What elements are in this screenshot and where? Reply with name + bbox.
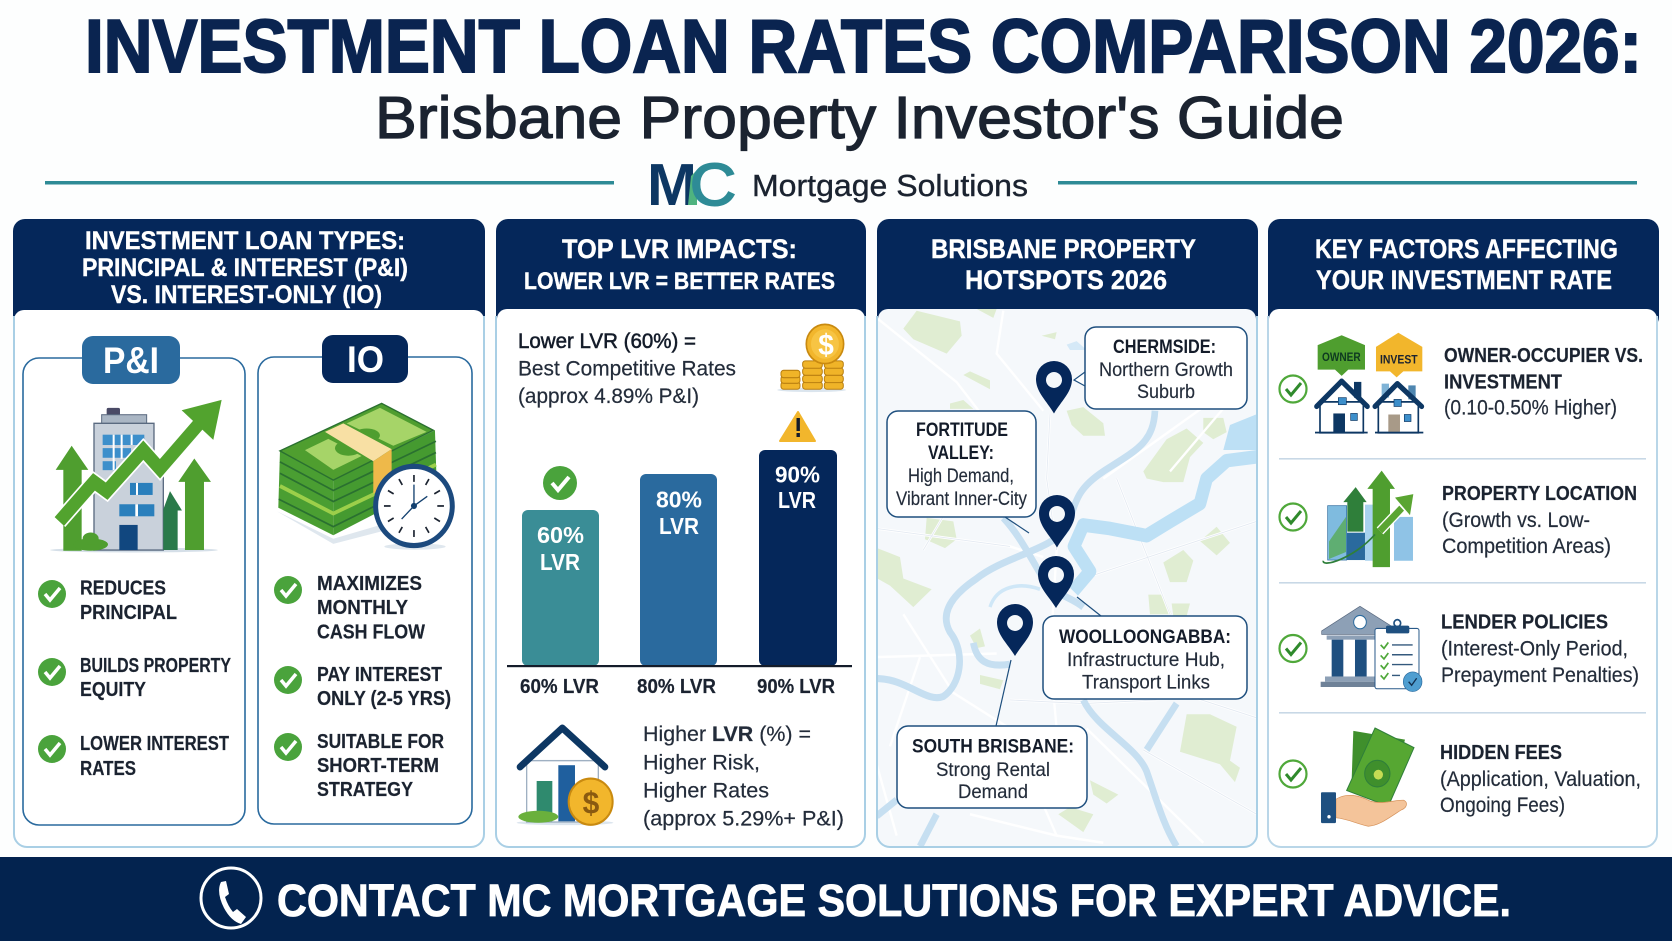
callout: Fortitude Valley: FORTITUDE [916,419,1008,441]
icon: cash stack with clock [277,403,452,550]
icon: phone [201,868,261,928]
text: lower LVR note: Lower LVR (60%) = [518,329,696,353]
badge: P&I: P&I [103,340,159,381]
callout: Fortitude Valley: VALLEY: [928,442,994,464]
bar chart: LVR: 90% [775,462,820,488]
list: P&I benefits [38,578,232,780]
footer banner [0,857,1672,941]
icon: bank and clipboard [1321,606,1422,692]
callout: Woolloongabba: WOOLLOONGABBA: [1059,626,1231,648]
callout: Woolloongabba [1043,616,1247,699]
callout: Woolloongabba: Transport Links [1082,672,1210,694]
callout: Chermside [1085,327,1247,409]
bar chart: LVR: 80% LVR [637,676,717,698]
factor: owner-occupier vs investment [1280,333,1643,433]
heading: loan types: PRINCIPAL & INTEREST (P&I) [82,254,408,282]
factor: lender policies: Prepayment Penalties) [1441,663,1639,687]
icon: gold coins [777,324,846,392]
text: higher LVR note: Higher LVR (%) = [643,722,811,746]
factor: hidden fees [1280,728,1641,826]
heading: key factors: KEY FACTORS AFFECTING [1315,234,1618,264]
bar chart: LVR [507,450,852,698]
icon: warning triangle [780,412,815,441]
icon: two houses: INVEST [1380,353,1418,366]
call to action text: CONTACT MC MORTGAGE SOLUTIONS FOR EXPERT ADVICE. [277,875,1511,926]
badge: IO [322,335,408,383]
card: IO [258,335,472,824]
bar chart: LVR: LVR [540,549,580,575]
text: lower LVR note [518,329,736,408]
heading: hotspots [931,234,1196,295]
list: P&I benefits: PRINCIPAL [80,602,177,624]
pin: Chermside [1036,361,1072,414]
factor: lender policies: LENDER POLICIES [1441,612,1608,634]
bar chart: LVR: 60% [537,522,584,548]
callout: South Brisbane: Strong Rental [936,759,1050,781]
icon: two houses: OWNER [1322,351,1361,364]
heading: loan types: INVESTMENT LOAN TYPES: [85,227,405,255]
factor: property location: Competition Areas) [1442,534,1611,558]
pin: South Brisbane [997,604,1033,656]
heading: hotspots: BRISBANE PROPERTY [931,234,1196,264]
text: higher LVR note [643,722,844,830]
logo: MC Mortgage Solutions: C [690,152,736,218]
heading: LVR impacts [524,234,835,295]
list: IO benefits: STRATEGY [317,779,414,801]
panel: investment loan types [13,219,485,847]
icon: building with growth arrows [50,400,222,552]
list: IO benefits: MONTHLY [317,597,409,619]
bar chart: LVR: 90% LVR [757,676,836,698]
bar chart: LVR: 80% [656,486,702,512]
list: IO benefits: CASH FLOW [317,622,425,644]
map: Brisbane [877,309,1260,846]
text: lower LVR note: Best Competitive Rates [518,356,736,380]
list: P&I benefits: LOWER INTEREST [80,733,229,755]
factor: property location: PROPERTY LOCATION [1442,483,1637,505]
heading: LVR impacts: TOP LVR IMPACTS: [562,234,797,264]
list: IO benefits: SUITABLE FOR [317,731,444,753]
list: IO benefits: MAXIMIZES [317,573,422,595]
callout: Woolloongabba: Infrastructure Hub, [1067,649,1225,671]
factor: owner-occupier vs investment: INVESTMENT [1444,372,1562,394]
panel: Brisbane hotspots [877,219,1260,847]
list: IO benefits: PAY INTEREST [317,664,442,686]
callout: Fortitude Valley: High Demand, [908,465,1014,487]
list: P&I benefits: EQUITY [80,679,147,701]
panel: LVR impacts [496,219,866,847]
heading: LVR impacts: LOWER LVR = BETTER RATES [524,268,835,295]
factor: owner-occupier vs investment: OWNER-OCCUPIER VS. [1444,345,1643,367]
icon: location growth chart [1323,471,1413,567]
factor: hidden fees: Ongoing Fees) [1440,793,1565,817]
bar chart: LVR: 60% LVR [520,676,600,698]
callout: Chermside: Suburb [1137,381,1195,403]
callout: South Brisbane [897,726,1087,808]
logo: MC Mortgage Solutions: Mortgage Solutions [752,168,1028,203]
factor: hidden fees: (Application, Valuation, [1440,767,1641,791]
callout: Fortitude Valley: Vibrant Inner-City [896,488,1027,510]
subtitle: Brisbane Property Investor's Guide [375,85,1344,151]
callout: South Brisbane: SOUTH BRISBANE: [912,736,1074,758]
callout: Chermside: CHERMSIDE: [1113,336,1216,358]
factor: property location [1280,471,1637,567]
heading: loan types [82,227,408,309]
callout: Fortitude Valley [887,411,1036,517]
list: P&I benefits: BUILDS PROPERTY [80,655,232,677]
badge: IO: IO [347,339,384,380]
logo: MC Mortgage Solutions: M [647,152,697,218]
pin: Fortitude Valley [1039,495,1075,548]
text: lower LVR note: (approx 4.89% P&I) [518,384,699,408]
pin: Woolloongabba [1038,556,1074,608]
factor: hidden fees: HIDDEN FEES [1440,742,1562,764]
bar chart: LVR: LVR [659,513,699,539]
logo: MC Mortgage Solutions [45,152,1637,218]
badge: P&I [82,336,180,384]
text: higher LVR note: Higher Risk, [643,750,760,774]
panel: key factors [1268,219,1659,847]
heading: key factors: YOUR INVESTMENT RATE [1316,265,1612,295]
icon: house with coin: $ [583,785,599,821]
bar chart: LVR: LVR [778,487,816,513]
heading: hotspots: HOTSPOTS 2026 [965,265,1167,295]
icon: house with coin [517,728,613,825]
callout: Chermside: Northern Growth [1099,359,1233,381]
list: P&I benefits: REDUCES [80,578,166,600]
icon: hand holding cash [1321,728,1414,826]
text: higher LVR note: Higher Rates [643,778,769,802]
factor: owner-occupier vs investment: (0.10-0.50% Higher) [1444,396,1617,420]
factor: lender policies [1280,606,1639,692]
card: P&I [23,336,245,825]
list: IO benefits [274,573,451,801]
list: IO benefits: ONLY (2-5 YRS) [317,688,451,710]
list: IO benefits: SHORT-TERM [317,755,439,777]
icon: check above 60% bar [543,466,577,500]
icon: two houses [1315,333,1423,433]
factor: property location: (Growth vs. Low- [1442,508,1590,532]
heading: key factors [1315,234,1618,295]
icon: gold coins: $ [818,329,834,362]
text: higher LVR note: (approx 5.29%+ P&I) [643,806,844,830]
list: P&I benefits: RATES [80,758,136,780]
factor: lender policies: (Interest-Only Period, [1441,636,1628,660]
callout tails [996,372,1101,726]
heading: loan types: VS. INTEREST-ONLY (IO) [111,281,382,309]
callout: South Brisbane: Demand [958,781,1028,803]
